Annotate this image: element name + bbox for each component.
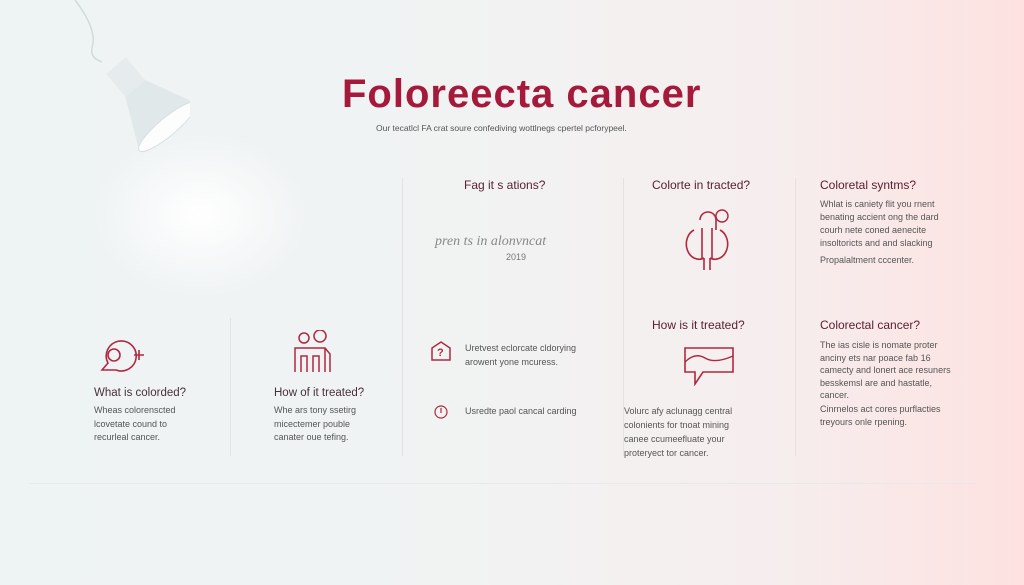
panel: fag its ations: 2019 (506, 252, 526, 262)
panel: colorectal cancer (820, 318, 951, 427)
icon: question house (431, 341, 451, 361)
panel: coloretal syntms (820, 178, 939, 265)
panel: what is (94, 340, 186, 442)
panel: colorte in tracted: Colorte in tracted? (652, 178, 750, 192)
panel: colorte in tracted: colonients for tnoat mining (624, 420, 729, 430)
panel: fag its ations: Usredte paol cancal carding (465, 406, 577, 416)
panel: fag its ations: pren ts in alonvncat (435, 234, 546, 249)
panel: colorectal cancer: treyours onle rpening. (820, 417, 907, 427)
panel: colorte in tracted: Volurc afy aclunagg central (624, 406, 732, 416)
panel: what is: Wheas colorenscted (94, 405, 176, 415)
light glow (90, 130, 310, 300)
panel: coloretal syntms: insoltoricts and and slacking (820, 238, 933, 248)
panel: what is: lcovetate cound to (94, 418, 167, 428)
panel: how of it (274, 330, 364, 442)
subtitle: Our tecatlcl FA crat soure confediving wottlnegs cpertel pcforypeel. (376, 123, 627, 133)
panel: colorectal cancer: Cinrnelos act cores purflacties (820, 404, 941, 414)
icon: intestines (686, 209, 729, 270)
icon: alert circle (434, 405, 448, 419)
panel: colorectal cancer: Colorectal cancer? (820, 318, 920, 332)
panel: colorectal cancer: cancer. (820, 390, 849, 400)
icon: lamp (74, 0, 190, 152)
icon: circle plus (100, 340, 144, 372)
panel: colorectal cancer: besskemsl are and hastatle, (820, 378, 932, 388)
panel: fag its ations: arowent yone mcuress. (465, 356, 558, 366)
panel: coloretal syntms: courh nete coned aenecite (820, 225, 926, 235)
icon: people (294, 330, 331, 372)
icon: chart message (684, 347, 734, 386)
title: Foloreecta cancer (342, 72, 701, 116)
panel: colorectal cancer: anciny ets nar poace fab 16 (820, 352, 931, 362)
panel: coloretal syntms: Whlat is caniety flit you rnent (820, 199, 935, 209)
panel: colorte in tracted: proteryect tor cancer. (624, 448, 709, 458)
panel: fag its ations: Uretvest eclorcate cldorying (465, 343, 576, 353)
panel: how of it: canater oue tefing. (274, 432, 349, 442)
panel: colorte in tracted (624, 178, 750, 458)
panel: coloretal syntms: benating accient ong the dard (820, 212, 939, 222)
panel: colorte in tracted: How is it treated? (652, 318, 745, 332)
icon: question house: ? (437, 347, 444, 359)
panel: how of it: How of it treated? (274, 387, 364, 399)
panel: coloretal syntms: Coloretal syntms? (820, 178, 916, 192)
panel: fag its ations (431, 178, 577, 419)
panel: fag its ations: Fag it s ations? (464, 178, 545, 192)
panel: how of it: micectemer pouble (274, 418, 350, 428)
panel: coloretal syntms: Propalaltment cccenter. (820, 255, 914, 265)
panel: what is: What is colorded? (94, 387, 186, 399)
panel: how of it: Whe ars tony ssetirg (274, 405, 356, 415)
panel: colorte in tracted: canee ccumeefluate your (624, 434, 725, 444)
panel: colorectal cancer: The ias cisle is nomate proter (820, 340, 938, 350)
panel: colorectal cancer: camecty and lonert ace resuners (820, 365, 951, 375)
panel: what is: recurleal cancer. (94, 432, 160, 442)
